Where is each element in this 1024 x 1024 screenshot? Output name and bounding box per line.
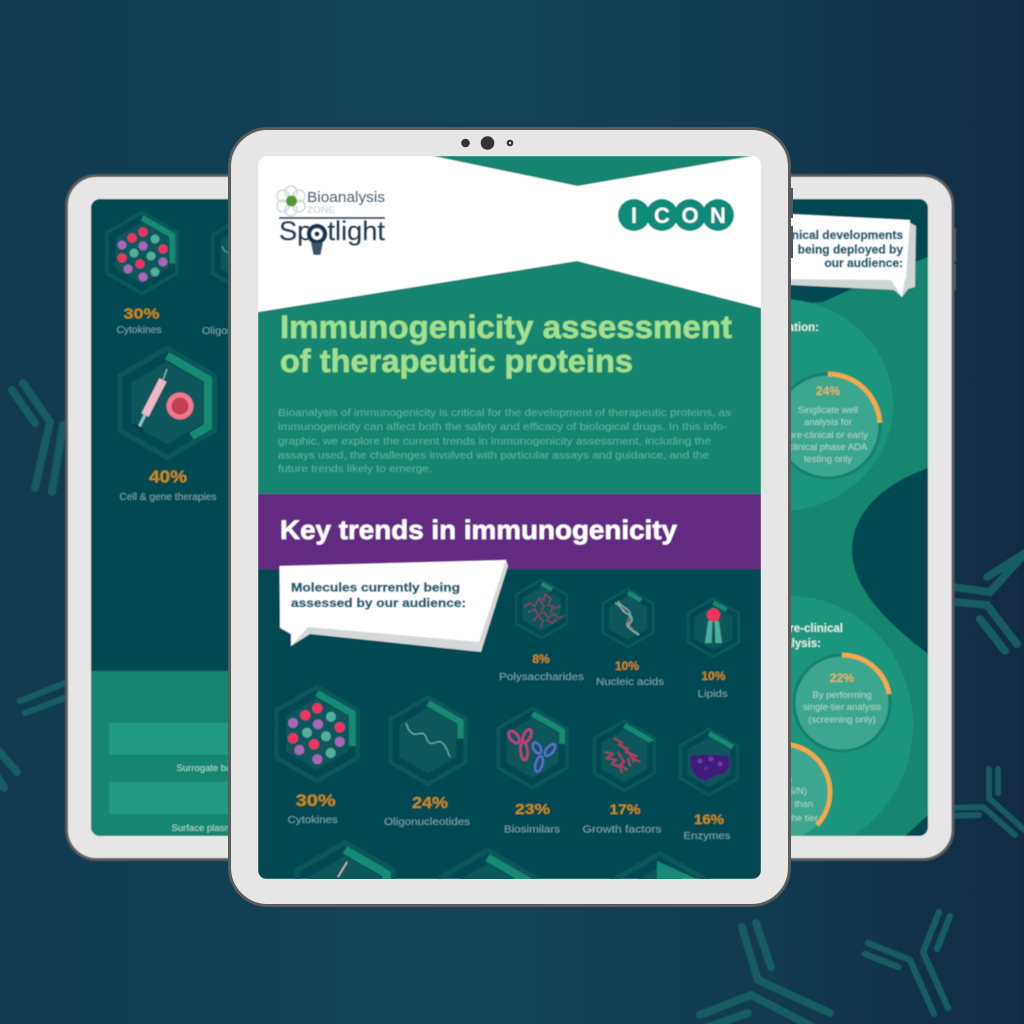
teal wave: [791, 256, 928, 836]
antibody: left lower: [0, 747, 17, 788]
icon: growth factor ribbons: [605, 738, 640, 773]
logo rule: [279, 217, 385, 219]
intro paragraph: [278, 407, 731, 475]
stat: polysaccharides 8%: 8%: [532, 652, 550, 666]
label: cytokines: Cytokines: [116, 325, 162, 336]
logo: ICON: N: [710, 203, 726, 228]
hexagon: enzymes: [681, 729, 737, 795]
icon: syringe: [134, 369, 167, 430]
stat: cell and gene therapies 40%: 40%: [149, 466, 187, 486]
hexagon: lipids: [688, 599, 739, 657]
title: Immunogenicity assessment: [280, 309, 732, 345]
icon: oligonucleotide strand: [406, 723, 450, 757]
left chart panel: [90, 670, 228, 836]
heading: pre-clinical analysis: Pre-clinical: [782, 623, 843, 635]
stat: oligonucleotides 24%: 24%: [229, 306, 259, 323]
white header: [258, 156, 761, 316]
logo: Bioanalysis Zone: [277, 186, 385, 216]
donut: 24% singlicate: Singlicate well: [798, 405, 858, 416]
label: cytokines: Cytokines: [288, 815, 338, 826]
intro paragraph: Bioanalysis of immunogenicity is critical for the development of therapeutic proteins, as: [278, 407, 731, 419]
left tablet screen: [90, 198, 228, 837]
label: surface plasmon: Surface plasmon: [172, 823, 243, 834]
title: of therapeutic proteins: [280, 343, 633, 379]
stat: nucleic acids 10%: 10%: [615, 659, 639, 673]
donut: 24% singlicate: pre-clinical or early: [788, 430, 868, 441]
bar: surrogate: [109, 723, 228, 755]
antibody: bottom right: [865, 912, 950, 1014]
light circle lower: [791, 596, 913, 836]
heading: validation: Validation:: [761, 322, 819, 334]
intro paragraph: graphic, we explore the current trends in immunogenicity assessment, including the: [278, 436, 711, 448]
intro paragraph: assays used, the challenges involved with particular assays and guidance, and the: [278, 450, 709, 462]
right tablet screen: [791, 198, 929, 837]
antibody: left middle: [20, 681, 70, 713]
main tablet: [230, 128, 792, 963]
camera dots: [461, 136, 513, 150]
hexagon: oligonucleotides: [391, 697, 465, 784]
label: oligonucleotides: Oligonucleotides: [202, 326, 282, 337]
right tablet: [791, 174, 956, 862]
antibody icons background: [0, 383, 1024, 1024]
donut: 24% singlicate: analysis for: [804, 417, 852, 428]
light circle upper: [791, 298, 893, 510]
speech bubble: clinical developments: Clinical developments: [776, 228, 903, 242]
speech bubble: molecules: Molecules currently being: [291, 580, 460, 594]
intro paragraph: future trends likely to emerge.: [278, 463, 432, 475]
hexagon: cytokines: [276, 687, 358, 781]
hexagon: biosimilars: [498, 709, 567, 787]
bar: surface plasmon: [109, 782, 228, 814]
label: cell and gene therapies: Cell & gene therapies: [120, 492, 216, 503]
donut: signal to noise: the tier: [789, 813, 818, 824]
donut: 22% single-tier: (screening only): [808, 714, 876, 726]
stat: biosimilars 23%: 23%: [515, 801, 550, 818]
icon: polysaccharide network: [524, 594, 564, 627]
label: surrogate: Surrogate based: [176, 763, 247, 774]
hexagon: nucleic acids: [603, 589, 653, 647]
speech bubble: clinical developments: being deployed by: [798, 242, 903, 256]
donut: 24% singlicate: testing only: [804, 454, 852, 465]
stat: enzymes 16%: 16%: [694, 811, 725, 827]
purple band: [258, 494, 761, 569]
antibody: bottom large: [700, 923, 830, 1024]
main tablet screen: [258, 156, 761, 879]
icon: lipid: [705, 608, 722, 643]
heading: pre-clinical analysis: analysis:: [772, 638, 821, 650]
logo: ICON: C: [654, 203, 670, 228]
icon: cytokine dots: [288, 703, 345, 764]
logo: ICON: O: [681, 203, 699, 228]
speech bubble: clinical developments: [791, 213, 917, 298]
hexagon: bottom left clipped: [297, 843, 393, 953]
label: enzymes: Enzymes: [684, 831, 730, 842]
icon: enzyme blob: [690, 754, 730, 781]
icon: syringe tip: [338, 862, 347, 877]
intro paragraph: immunogenicity can affect both the safety and efficacy of biological drugs. In this info-: [278, 421, 728, 433]
top chevron: [433, 156, 752, 186]
speech bubble: molecules: assessed by our audience:: [291, 596, 466, 610]
teal title panel: [258, 261, 761, 500]
hexagon: growth factors: [594, 721, 655, 790]
donut: 24% singlicate: clinical phase ADA: [789, 442, 868, 453]
hexagon: bottom right clipped: [613, 853, 707, 963]
stat: oligonucleotides 24%: 24%: [412, 795, 448, 812]
donut: 22% single-tier: [794, 655, 890, 751]
donut: 22% single-tier: single-tier analysis: [803, 702, 881, 713]
logo: ICON: [618, 199, 734, 231]
donut: 24% singlicate: [776, 374, 880, 478]
hexagon: bottom middle clipped: [440, 850, 535, 960]
label: oligonucleotides: Oligonucleotides: [384, 817, 470, 828]
label: biosimilars: Biosimilars: [504, 824, 560, 836]
donut: signal to noise: the: [779, 774, 792, 786]
label: polysaccharides: Polysaccharides: [499, 672, 584, 683]
antibody: right upper: [945, 548, 1024, 651]
icon: blue antibody: [531, 741, 557, 773]
stat: cytokines 30%: 30%: [124, 306, 160, 322]
heading: key trends: Key trends in immunogenicity: [280, 515, 677, 545]
left tablet: [64, 174, 228, 862]
logo: Spotlight: Spotlight: [279, 216, 385, 246]
logo: Bioanalysis Zone: Bioanalysis: [307, 189, 385, 206]
logo: ICON: I: [631, 203, 637, 228]
stat: growth factors 17%: 17%: [610, 801, 641, 817]
icon: pink antibody: [506, 728, 533, 760]
icon: cell: [166, 392, 194, 420]
label: lipids: Lipids: [698, 689, 728, 700]
hexagon: polysaccharides: [516, 580, 567, 638]
logo: Bioanalysis Zone: ZONE: [307, 205, 335, 215]
stat: cytokines 30%: 30%: [296, 791, 336, 810]
speech bubble: molecules: [280, 560, 508, 652]
donut: 22% single-tier: By performing: [812, 690, 872, 701]
title: [280, 309, 732, 379]
stat: lipids 10%: 10%: [701, 669, 726, 683]
antibody: left top: [12, 383, 63, 492]
donut: signal to noise: rather than: [767, 799, 813, 810]
heading: pre-clinical analysis: [791, 622, 844, 650]
antibody: right lower: [945, 769, 1024, 835]
hexagon: cytokines: [107, 213, 177, 293]
donut: signal to noise: [791, 742, 834, 836]
main tablet side buttons: [790, 188, 793, 258]
hexagon: oligonucleotides: [210, 224, 228, 284]
right tablet side buttons: [954, 228, 956, 290]
donut: signal to noise: (S/N): [785, 786, 807, 797]
hexagon: cell and gene therapies: [120, 348, 214, 458]
dark lower panel: [258, 569, 761, 879]
speech bubble: clinical developments: our audience:: [824, 256, 903, 270]
label: growth factors: Growth factors: [582, 824, 662, 836]
icon: DNA helix: [615, 601, 639, 635]
donut: 24% singlicate: 24%: [816, 384, 840, 398]
donut: 22% single-tier: 22%: [830, 671, 854, 685]
label: nucleic acids: Nucleic acids: [596, 677, 664, 688]
